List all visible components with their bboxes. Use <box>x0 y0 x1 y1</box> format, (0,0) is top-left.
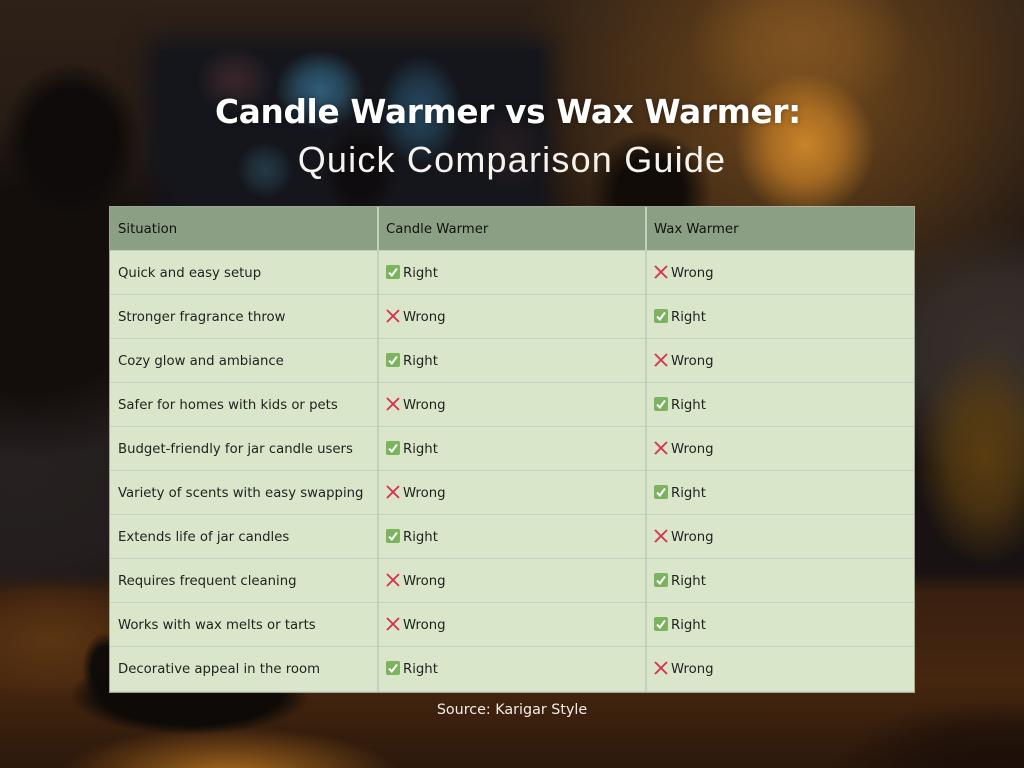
row: quick and easy setup <box>110 251 914 295</box>
row: works with wax melts or tarts: Works with wax melts or tarts <box>118 618 316 633</box>
row: cozy glow and ambiance: Cozy glow and ambiance <box>118 354 284 369</box>
row: stronger fragrance throw: Wrong <box>403 310 446 325</box>
row: variety of scents with easy swapping: Right <box>671 486 706 501</box>
comparison table <box>110 207 914 692</box>
row: quick and easy setup: Quick and easy setup <box>118 266 261 281</box>
row: safer for homes with kids or pets: Wrong <box>403 398 446 413</box>
row: variety of scents with easy swapping <box>110 471 914 515</box>
row: requires frequent cleaning: Requires frequent cleaning <box>118 574 297 589</box>
row: decorative appeal in the room <box>110 647 914 692</box>
row: decorative appeal in the room: Decorative appeal in the room <box>118 662 320 677</box>
row: extends life of jar candles: Right <box>403 530 438 545</box>
row: variety of scents with easy swapping: Wrong <box>403 486 446 501</box>
row: requires frequent cleaning: Wrong <box>403 574 446 589</box>
row: cozy glow and ambiance <box>110 339 914 383</box>
row: works with wax melts or tarts: Wrong <box>403 618 446 633</box>
row: stronger fragrance throw <box>110 295 914 339</box>
row: budget-friendly for jar candle users <box>110 427 914 471</box>
row: budget-friendly for jar candle users: Wrong <box>671 442 714 457</box>
row: variety of scents with easy swapping: Variety of scents with easy swapping <box>118 486 363 501</box>
row: requires frequent cleaning <box>110 559 914 603</box>
row: cozy glow and ambiance: Right <box>403 354 438 369</box>
row: extends life of jar candles: Extends life of jar candles <box>118 530 289 545</box>
table header row <box>110 207 914 251</box>
row: safer for homes with kids or pets <box>110 383 914 427</box>
row: extends life of jar candles: Wrong <box>671 530 714 545</box>
row: stronger fragrance throw: Right <box>671 310 706 325</box>
row: decorative appeal in the room: Wrong <box>671 662 714 677</box>
row: works with wax melts or tarts <box>110 603 914 647</box>
row: cozy glow and ambiance: Wrong <box>671 354 714 369</box>
row: safer for homes with kids or pets: Right <box>671 398 706 413</box>
row: stronger fragrance throw: Stronger fragrance throw <box>118 310 285 325</box>
row: decorative appeal in the room: Right <box>403 662 438 677</box>
table header row: Wax Warmer <box>654 222 739 237</box>
row: safer for homes with kids or pets: Safer for homes with kids or pets <box>118 398 338 413</box>
row: works with wax melts or tarts: Right <box>671 618 706 633</box>
table header row: Candle Warmer <box>386 222 488 237</box>
source note: Source: Karigar Style <box>437 702 587 718</box>
row: requires frequent cleaning: Right <box>671 574 706 589</box>
row: extends life of jar candles <box>110 515 914 559</box>
row: budget-friendly for jar candle users: Right <box>403 442 438 457</box>
title: Candle Warmer vs Wax Warmer: <box>215 93 801 131</box>
subtitle: Quick Comparison Guide <box>298 139 726 180</box>
row: quick and easy setup: Right <box>403 266 438 281</box>
row: quick and easy setup: Wrong <box>671 266 714 281</box>
table header row: Situation <box>118 222 177 237</box>
row: budget-friendly for jar candle users: Budget-friendly for jar candle users <box>118 442 353 457</box>
